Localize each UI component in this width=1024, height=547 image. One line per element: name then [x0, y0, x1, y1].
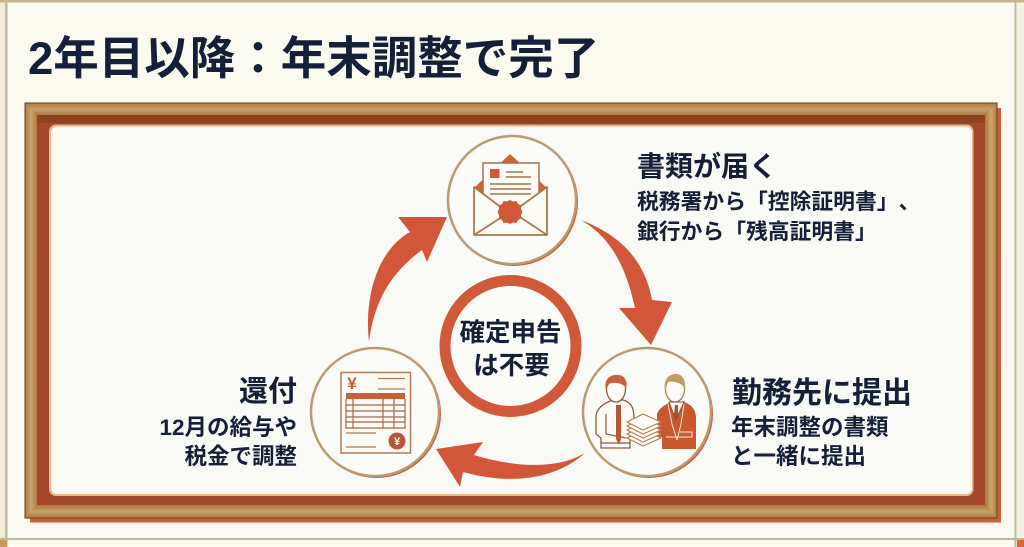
- arrow: top to right: [581, 220, 672, 345]
- center ring callout: [445, 280, 576, 412]
- step 3 line 1: 12月の給与や: [159, 415, 297, 440]
- step 3 heading: 還付: [239, 375, 297, 408]
- step 2 text: [731, 377, 912, 469]
- step 2 line 1: 年末調整の書類: [731, 415, 889, 440]
- step 3 line 2: 税金で調整: [184, 444, 297, 469]
- center text line 2: は不要: [473, 352, 550, 380]
- right person: [657, 374, 696, 449]
- step 1 line 2: 銀行から「残高証明書」: [637, 219, 877, 244]
- stack of documents: [627, 414, 661, 446]
- step 1 heading: 書類が届く: [637, 150, 777, 182]
- arrow: left to top: [368, 217, 447, 342]
- icon: envelope: [448, 136, 578, 266]
- step 1 text: [637, 150, 920, 244]
- yen seal: ¥: [394, 436, 401, 448]
- step 1 line 1: 税務署から「控除証明書」、: [637, 189, 920, 214]
- step 2 line 2: と一緒に提出: [731, 444, 866, 469]
- title: 2年目以降：年末調整で完了: [28, 33, 599, 84]
- step 2 heading: 勤務先に提出: [732, 377, 912, 410]
- arrow: right to left: [436, 442, 585, 487]
- step 3 text: [159, 375, 297, 469]
- yen mark: ¥: [347, 374, 357, 393]
- center text line 1: 確定申告: [459, 319, 562, 347]
- panel: wooden frame: [25, 103, 1001, 522]
- icon: invoice with yen: [311, 348, 441, 478]
- left person: [596, 375, 634, 448]
- icon: handing over documents: [583, 348, 713, 478]
